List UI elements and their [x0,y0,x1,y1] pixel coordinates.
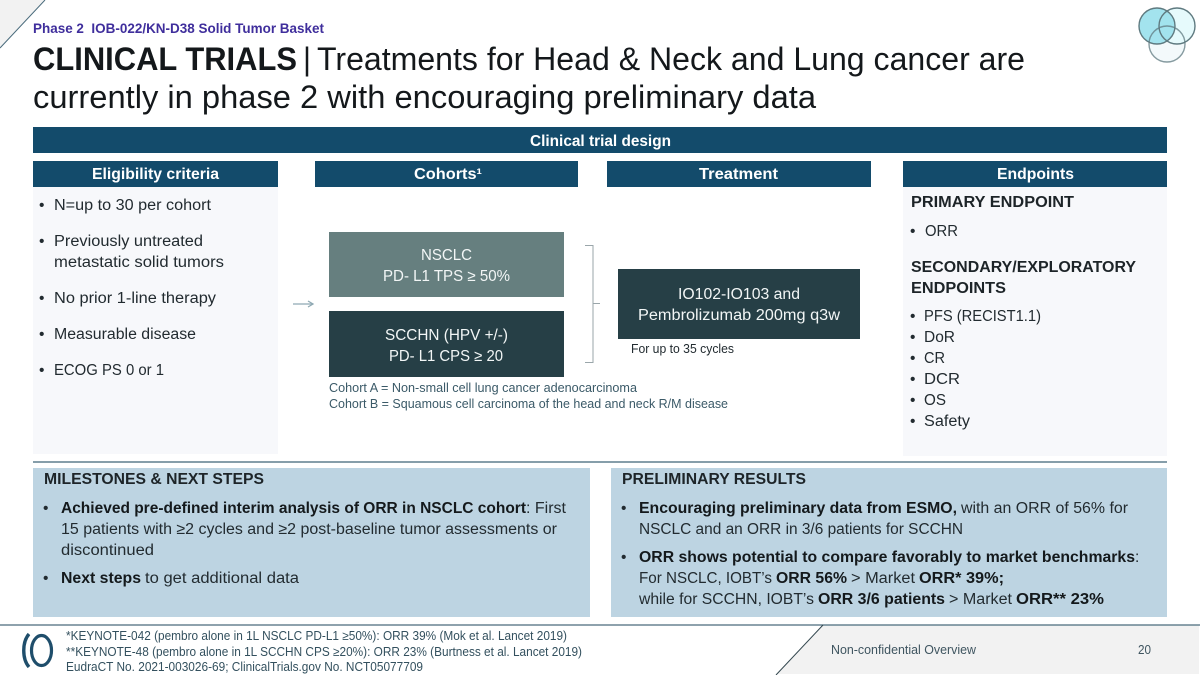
secondary endpoints: • [910,392,915,409]
icon: overlapping circles [1139,8,1195,62]
cohort box: SCCHN: PD- L1 CPS ≥ 20 [389,348,503,365]
banner: clinical trial design [33,127,1167,153]
secondary endpoints: DCR [924,371,960,388]
results text: : [1135,549,1139,566]
secondary endpoints: DoR [924,329,955,346]
footer band [0,625,1200,675]
eligibility list: Measurable disease [54,326,196,343]
secondary endpoints: Safety [924,413,970,430]
heading: preliminary results: PRELIMINARY RESULTS [622,471,806,488]
heading: eligibility criteria [33,161,278,187]
results text: with an ORR of 56% for [960,500,1128,517]
cohort definitions [329,381,728,411]
panel: endpoints [903,161,1167,456]
milestones text: • [43,570,48,587]
eligibility list: • [39,290,44,307]
results text: • [621,500,626,517]
milestones text: : First [526,500,567,517]
results text: ORR shows potential to compare favorably to market benchmarks [639,549,1135,566]
treatment box: Pembrolizumab 200mg q3w [638,307,841,324]
milestones text: to get additional data [145,570,299,587]
page number: 20 [1138,643,1151,657]
results text: ORR 3/6 patients [818,591,945,608]
cohort box: SCCHN: SCCHN (HPV +/-) [385,327,508,344]
cohort definitions: Cohort B = Squamous cell carcinoma of the head and neck R/M disease [329,397,728,411]
title: | [303,41,311,77]
results text: > Market [851,570,916,587]
secondary endpoints: • [910,371,915,388]
primary endpoint: PRIMARY ENDPOINT [911,194,1075,211]
cohort box: NSCLC: PD- L1 TPS ≥ 50% [383,268,510,285]
milestones text: Achieved pre-defined interim analysis of ORR in NSCLC cohort [61,500,526,517]
cohort box: SCCHN [329,311,564,377]
title: currently in phase 2 with encouraging preliminary data [33,79,816,115]
title [33,41,1025,115]
results text: ORR** 23% [1016,591,1104,608]
primary endpoint: • [910,223,915,240]
treatment box: IO102-IO103 and [678,286,800,303]
results text: Encouraging preliminary data from ESMO, [639,500,957,517]
eligibility list: • [39,326,44,343]
heading: treatment: Treatment [699,166,778,183]
arrow: eligibility to cohorts [293,301,313,307]
title: Treatments for Head & Neck and Lung cancer are [317,41,1025,77]
eligibility list: • [39,362,44,379]
eligibility list: • [39,197,44,214]
results text: ORR* 39%; [919,570,1004,587]
secondary endpoints: • [910,308,915,325]
logo [24,634,52,667]
milestones text: Next steps [61,570,141,587]
footnotes: *KEYNOTE-042 (pembro alone in 1L NSCLC PD-L1 ≥50%): ORR 39% (Mok et al. Lancet 2019) [66,629,567,643]
eligibility list: Previously untreated [54,233,203,250]
cohort definitions: Cohort A = Non-small cell lung cancer adenocarcinoma [329,381,637,395]
heading: milestones: MILESTONES & NEXT STEPS [44,471,264,488]
secondary endpoints: • [910,413,915,430]
results text: NSCLC and an ORR in 3/6 patients for SCCHN [639,521,963,538]
milestones text: 15 patients with ≥2 cycles and ≥2 post-baseline tumor assessments or [61,521,557,538]
treatment box [618,269,860,339]
eligibility list: metastatic solid tumors [54,254,224,271]
heading: cohorts: Cohorts¹ [414,166,482,183]
secondary endpoints [910,259,1137,430]
heading: eligibility criteria: Eligibility criteria [92,166,219,183]
secondary endpoints: OS [924,392,946,409]
cohort box: NSCLC: NSCLC [421,247,472,264]
heading: treatment [607,161,871,187]
footnotes: EudraCT No. 2021-003026-69; ClinicalTrials.gov No. NCT05077709 [66,660,423,674]
secondary endpoints: ENDPOINTS [911,280,1006,297]
primary endpoint [910,194,1075,240]
eligibility list: ECOG PS 0 or 1 [54,362,164,379]
eyebrow: Phase 2 IOB-022/KN-D38 Solid Tumor Basket [33,20,324,36]
secondary endpoints: SECONDARY/EXPLORATORY [911,259,1137,276]
eligibility list: • [39,233,44,250]
eligibility list [39,197,224,379]
panel: preliminary results [611,468,1167,617]
heading: cohorts [315,161,578,187]
heading: endpoints [903,161,1167,187]
panel: eligibility criteria [33,161,278,454]
footnotes [66,629,582,674]
title: CLINICAL TRIALS [33,41,297,77]
results text [621,500,1139,608]
panel: milestones and next steps [33,468,590,617]
secondary endpoints: • [910,329,915,346]
eligibility list: No prior 1-line therapy [54,290,216,307]
results text: ORR 56% [776,570,847,587]
results text: For NSCLC, IOBT’s [639,570,772,587]
banner: clinical trial design: Clinical trial design [530,133,671,150]
treatment duration note: For up to 35 cycles [631,342,734,356]
bracket: cohorts to treatment [585,246,600,362]
results text: • [621,549,626,566]
results text: while for SCCHN, IOBT’s [638,591,814,608]
secondary endpoints: CR [924,350,945,367]
milestones text [43,500,567,587]
milestones text: • [43,500,48,517]
footer label: Non-confidential Overview [831,643,977,657]
footnotes: **KEYNOTE-48 (pembro alone in 1L SCCHN CPS ≥20%): ORR 23% (Burtness et al. Lancet 2019) [66,645,582,659]
heading: endpoints: Endpoints [997,166,1074,183]
eligibility list: N=up to 30 per cohort [54,197,212,214]
secondary endpoints: • [910,350,915,367]
secondary endpoints: PFS (RECIST1.1) [924,308,1041,325]
corner decoration [0,0,45,48]
cohort box: NSCLC [329,232,564,297]
primary endpoint: ORR [925,223,958,240]
milestones text: discontinued [61,542,154,559]
results text: > Market [949,591,1013,608]
